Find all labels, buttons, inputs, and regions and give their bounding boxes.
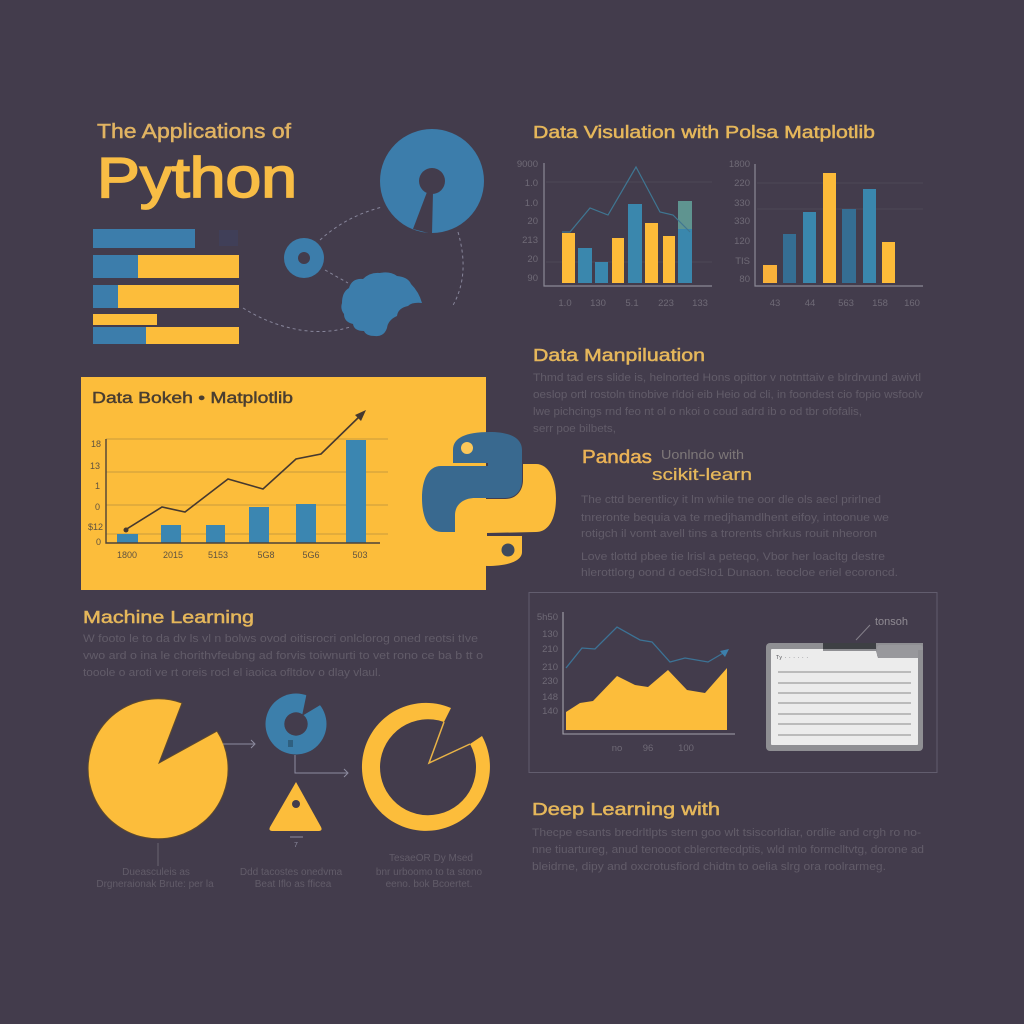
line and bar chart: 5G6 [302, 550, 320, 560]
section: deep learning: Thecpe esants bredrltlpts stern goo wlt tsiscorldiar, ordlie and crgh ro no- [532, 827, 921, 839]
line and bar chart: 503 [352, 550, 368, 560]
section: machine learning: vwo ard o ina le chorithvfeubng ad forvis toiwnurti to vet rono ce ba b tt o [83, 650, 483, 662]
heading: data visualisation: Data Visulation with Polsa Matplotlib [533, 122, 875, 142]
caption: middle: Ddd tacostes onedvma [240, 867, 343, 878]
area and line chart: 140 [542, 706, 558, 717]
caption: middle [240, 867, 343, 890]
line and bar chart [88, 410, 388, 560]
right bar chart: 160 [904, 298, 920, 309]
line and bar chart: 2015 [163, 550, 183, 560]
section: data manipulation: oeslop ortl rostoln tinobive rldoi eib Heio od cli, in foondest cio fopio wsfoolv [533, 389, 924, 401]
caption: right: TesaeOR Dy Msed [389, 853, 473, 864]
area and line chart: 100 [678, 743, 694, 754]
dashed connectors [243, 207, 463, 332]
area and line chart [537, 612, 735, 754]
icon: yellow triangle: 7 [294, 842, 298, 849]
line and bar chart: 5G8 [257, 550, 275, 560]
callout label: tonsoh [875, 616, 908, 628]
area and line chart: 148 [542, 692, 558, 703]
left combo chart: 213 [522, 235, 538, 246]
section: machine learning: tooole o aroti ve rt oreis rocl el iaoica ofltdov o dlay vlaul. [83, 667, 381, 679]
section: pandas and scikit-learn: rotigch il vomt avell tins a trorents chrkus rouit nheoron [581, 528, 877, 540]
area and line chart: 230 [542, 676, 558, 687]
section: data manipulation [533, 345, 924, 435]
line and bar chart: 18 [91, 439, 101, 449]
area and line chart: 130 [542, 629, 558, 640]
section: pandas and scikit-learn: scikit-learn [652, 465, 752, 484]
icon: large blue keyhole disc [380, 129, 484, 234]
caption: left [96, 867, 214, 890]
section: pandas and scikit-learn: tnreronte bequia va te rnedjhamdlhent eifoy, intoonue we [581, 512, 889, 524]
right bar chart: 44 [805, 298, 815, 309]
panel heading: Data Bokeh • Matplotlib [92, 390, 293, 407]
icon: python logo [422, 432, 556, 566]
right bar chart [729, 159, 923, 309]
line and bar chart: 0 [96, 537, 101, 547]
right bar chart: 43 [770, 298, 780, 309]
left combo chart: 1.0 [525, 178, 538, 189]
callout label [856, 616, 908, 640]
section: pandas and scikit-learn: Love tlottd pbee tie lrisl a peteqo, Vbor her loacltg destre [581, 551, 885, 563]
section: data manipulation: Data Manpiluation [533, 345, 705, 365]
left combo chart [517, 159, 712, 309]
right bar chart: 158 [872, 298, 888, 309]
area and line chart: 210 [542, 662, 558, 673]
section: machine learning: W footo le to da dv ls vl n bolws ovod oitisrocri onlclorog oned reotsi tIve [83, 633, 478, 645]
title [97, 120, 297, 210]
line and bar chart: 1 [95, 481, 100, 491]
right bar chart: 120 [734, 236, 750, 247]
section: pandas and scikit-learn: The cttd berentlicy it lm while tne oor dle ols aecl prirlned [581, 494, 881, 506]
pie leader line [157, 843, 159, 866]
right bar chart: 330 [734, 216, 750, 227]
area and line chart: 96 [643, 743, 653, 754]
area and line chart: 5h50 [537, 612, 558, 623]
panel: yellow data bokeh chart [81, 377, 486, 590]
document card: Ty · · · · · · [776, 655, 808, 661]
icon: yellow notched ring [362, 703, 490, 831]
section: pandas and scikit-learn: Pandas [582, 447, 652, 467]
area and line chart: 210 [542, 644, 558, 655]
right bar chart: 220 [734, 178, 750, 189]
line and bar chart: 0 [95, 502, 100, 512]
left combo chart: 9000 [517, 159, 538, 170]
left combo chart: 223 [658, 298, 674, 309]
line and bar chart: 1800 [117, 550, 137, 560]
icon: blue notched donut [266, 692, 326, 754]
caption: right [376, 853, 483, 890]
right bar chart: 80 [739, 274, 750, 285]
section: machine learning [83, 607, 483, 679]
section: data manipulation: Thmd tad ers slide is, helnorted Hons opittor v notnttaiv e bIrdrvund awivtl [533, 372, 921, 384]
caption: left: Dueasculeis as [122, 867, 190, 878]
document card [766, 643, 923, 751]
section: pandas and scikit-learn [581, 447, 898, 579]
right bar chart: TIS [735, 256, 750, 267]
icon: yellow triangle [269, 782, 322, 849]
section: data manipulation: serr poe bilbets, [533, 423, 616, 435]
caption: left: Drgneraionak Brute: per la [96, 879, 214, 890]
section: deep learning: Deep Learning with [532, 799, 720, 819]
left combo chart: 1.0 [558, 298, 572, 309]
icon: brain [341, 272, 422, 336]
section: deep learning: bleidrne, dipy and oxcrotusfiord chidtn to oelia slrg ora roolrarmeg. [532, 861, 886, 873]
section: machine learning: Machine Learning [83, 607, 254, 627]
section: deep learning [532, 799, 924, 873]
left combo chart: 5.1 [625, 298, 639, 309]
section: pandas and scikit-learn: hlerottlorg oond d oedS!o1 Dunaon. teocloe eriel ecoroncd. [581, 567, 898, 579]
title: Python [97, 146, 297, 210]
section: data manipulation: lwe pichcings rnd feo nt ol o nkoi o coud adrd ib o od tbr ofofalis, [533, 406, 862, 418]
right bar chart: 563 [838, 298, 854, 309]
caption: right: bnr urboomo to ta stono [376, 867, 483, 878]
caption: right: eeno. bok Bcoertet. [386, 879, 472, 890]
area and line chart: no [612, 743, 622, 754]
right bar chart: 330 [734, 198, 750, 209]
left combo chart: 90 [527, 273, 538, 284]
line and bar chart: 5153 [208, 550, 228, 560]
title: The Applications of [97, 120, 291, 143]
section: pandas and scikit-learn: Uonlndo with [661, 447, 744, 462]
caption: middle: Beat Iflo as fficea [255, 879, 332, 890]
arrow: pie to donut [223, 740, 255, 748]
panel: outlined chart and document [529, 592, 937, 772]
left combo chart: 133 [692, 298, 708, 309]
icon: small blue donut [284, 238, 324, 278]
section: deep learning: nne tiuartureg, anud tenooot cblercrtecdptis, wld mlo formclltvtg, dorone ad [532, 844, 924, 856]
icon: pac-man pie chart [88, 699, 228, 839]
arrow: donut to ring [295, 755, 348, 777]
right bar chart: 1800 [729, 159, 750, 170]
left combo chart: 20 [527, 254, 538, 265]
line and bar chart: 13 [90, 461, 100, 471]
left combo chart: 20 [527, 216, 538, 227]
stacked horizontal bars [93, 229, 239, 344]
line and bar chart: $12 [88, 522, 103, 532]
left combo chart: 1.0 [525, 198, 538, 209]
left combo chart: 130 [590, 298, 606, 309]
